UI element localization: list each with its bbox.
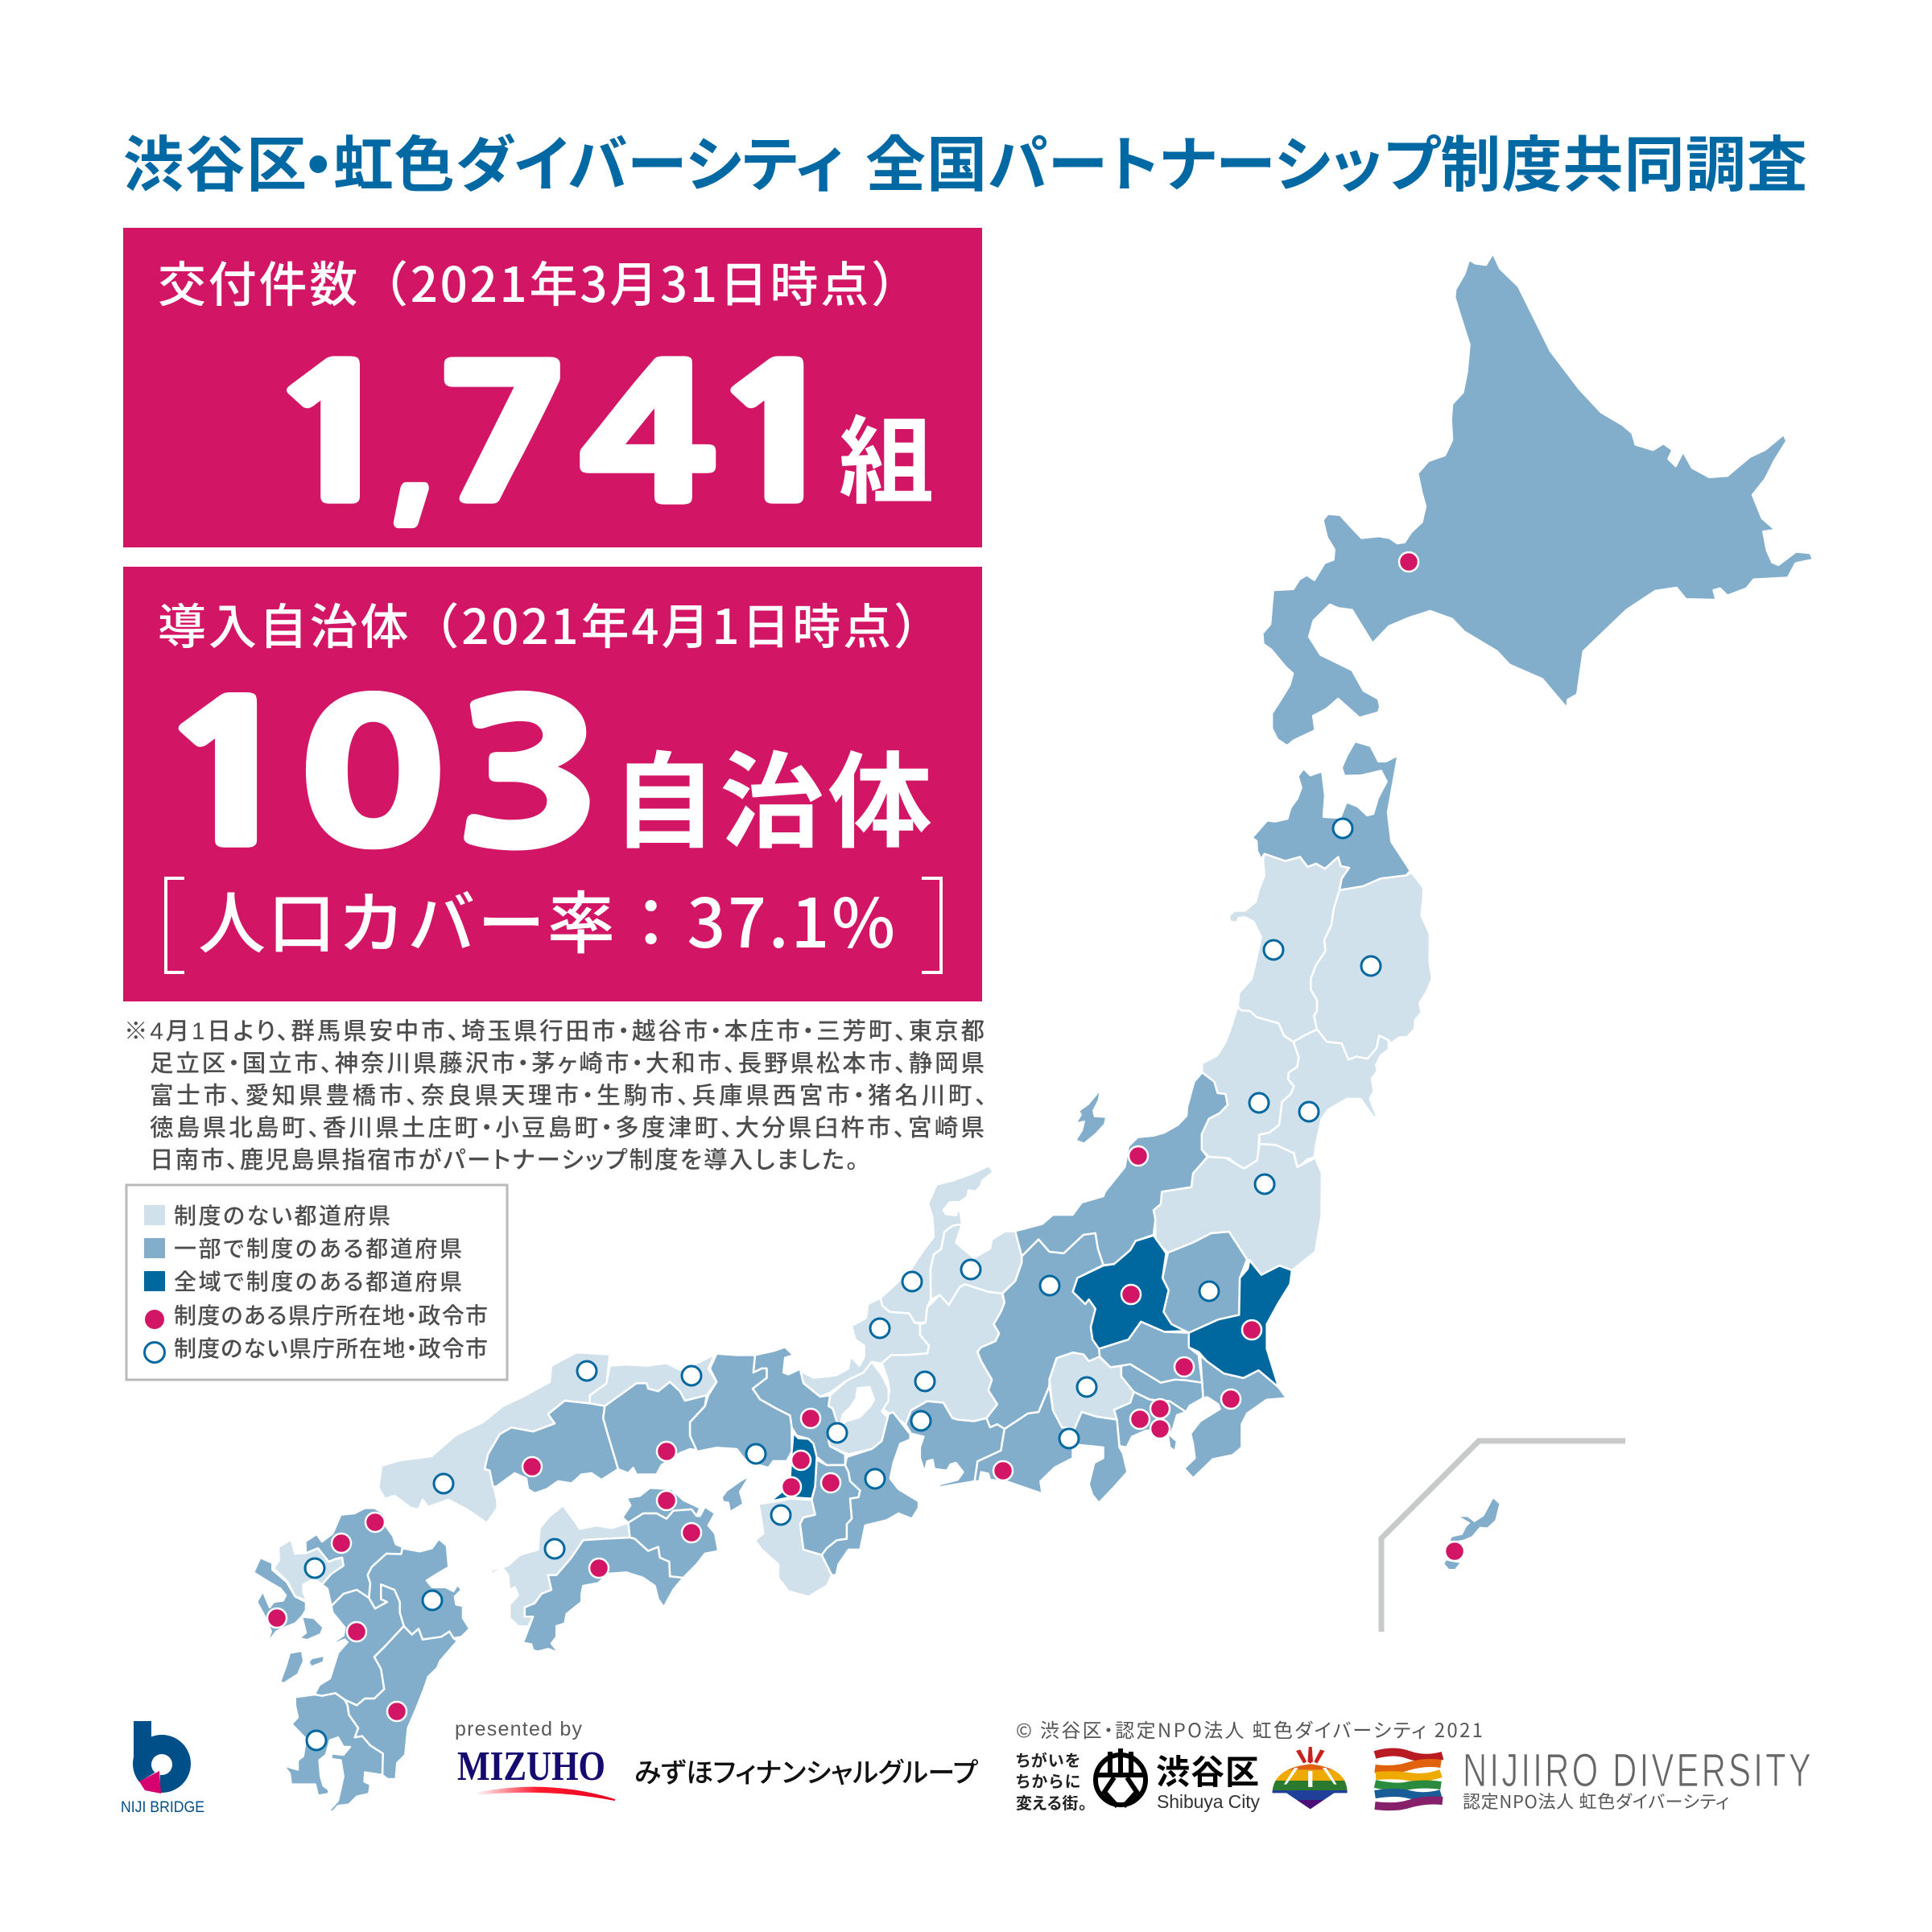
title [123,130,1807,199]
sponsor: Mizuho Financial Group: MIZUHO [457,1744,605,1790]
Kansai, Chugoku and Shikoku prefectures [378,1347,919,1653]
panel heading: municipalities: 導入自治体（2021年4月1日時点） [158,588,942,658]
unit: 自治体: 自治体 [612,718,932,869]
Tohoku prefectures [1202,741,1432,1170]
legend [126,1185,507,1380]
left bracket [166,878,184,972]
city markers: prefectural capitals with the system [267,552,1464,1721]
logo: Niji Bridge [121,1721,204,1816]
footnote text: 富士市、愛知県豊橋市、奈良県天理市・生駒市、兵庫県西宮市・猪名川町、 [150,1083,987,1109]
right bracket [922,878,941,972]
legend: 制度のない県庁所在地・政令市 [174,1336,488,1361]
title: • [308,130,329,198]
population coverage: 人口カバー率：37.1% [198,870,895,968]
map of Japan [254,254,1813,1812]
Kyushu prefectures [254,1508,469,1812]
copyright line: © 渋谷区・認定NPO法人 虹色ダイバーシティ 2021 [1016,1715,1483,1743]
big number: 1,741: 741 [435,345,848,526]
legend: 一部で制度のある都道府県 [174,1236,462,1261]
Shibuya City slogan: 変える街。 [1016,1794,1087,1813]
Shibuya City slogan: ちからに [1016,1773,1080,1791]
footnote text: ※4月1日より、群馬県安中市、埼玉県行田市・越谷市・本庄市・三芳町、東京都 [124,1018,985,1045]
logo: Nijiiro Diversity wordmark: NIJIIRO DIVERSITY [1463,1744,1811,1797]
sponsor: Mizuho Financial Group: presented by [455,1718,583,1740]
logo: Nijiiro Diversity wordmark: 認定NPO法人 虹色ダイバーシティ [1463,1788,1729,1814]
logo: Nijiiro Diversity rainbow bands [1375,1752,1443,1806]
legend: 全域で制度のある都道府県 [174,1269,462,1294]
big number: 103: 103 [157,680,603,872]
Okinawa [1444,1499,1499,1569]
Okinawa inset frame line [1381,1441,1625,1632]
title: 虹色ダイバーシティ [333,131,844,199]
panel: municipalities [123,567,982,1001]
city markers: prefectural capitals without the system [305,819,1381,1750]
logo: Shibuya City wordmark: Shibuya City [1157,1791,1261,1812]
sponsor: Mizuho Financial Group: みずほフィナンシャルグループ [634,1751,979,1790]
Shibuya City slogan [1016,1751,1087,1813]
logo: Shibuya City wordmark: 渋谷区 [1156,1745,1259,1794]
logo: Shibuya City emblem [1096,1748,1146,1806]
legend: 制度のある県庁所在地・政令市 [174,1303,488,1328]
title: 全国パートナーシップ制度共同調査 [865,131,1807,199]
logo: Niji Bridge: NIJI BRIDGE [121,1799,204,1816]
footnote text: 日南市、鹿児島県指宿市がパートナーシップ制度を導入しました。 [150,1147,858,1174]
footnote text: 足立区・国立市、神奈川県藤沢市・茅ヶ崎市・大和市、長野県松本市、静岡県 [150,1051,985,1077]
Shibuya City slogan: ちがいを [1016,1751,1080,1770]
panel: certificates issued [123,228,982,547]
Sado island [1075,1089,1106,1144]
footnote text [124,1018,987,1174]
sponsor: Mizuho Financial Group [455,1718,979,1800]
unit: 組: 組 [839,385,934,522]
Hokkaido [1262,254,1813,745]
legend: 制度のない都道府県 [174,1203,390,1228]
panel heading: certificates: 交付件数（2021年3月31日時点） [158,246,919,316]
footnote text: 徳島県北島町、香川県土庄町・小豆島町・多度津町、大分県臼杵市、宮崎県 [150,1115,985,1141]
title: 渋谷区 [123,131,307,199]
big number: 1,741: 1 [266,345,404,526]
logo: rainbow flower [1270,1747,1350,1810]
Kanto and Chubu prefectures [800,1072,1322,1503]
big number: 1,741: , [390,345,434,526]
